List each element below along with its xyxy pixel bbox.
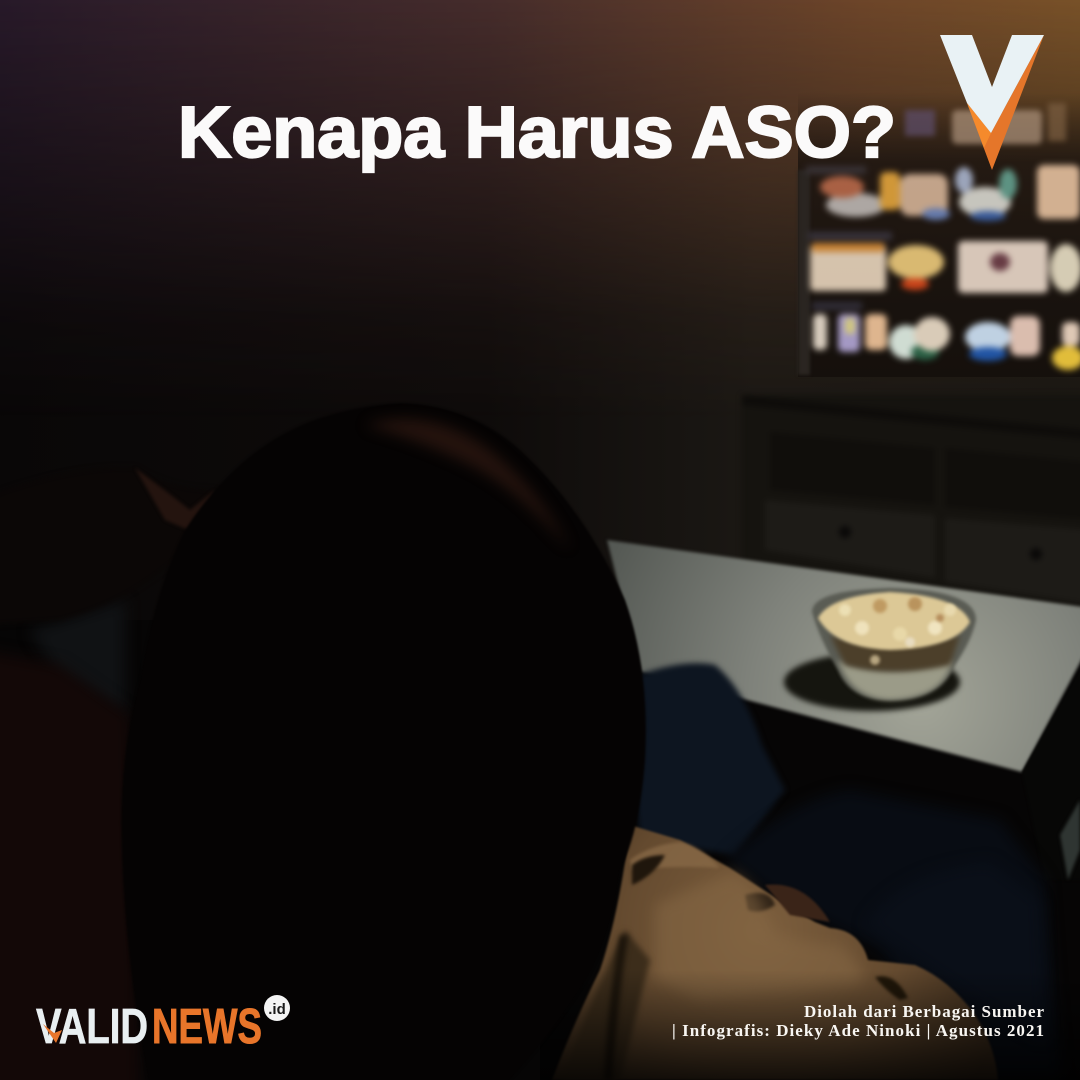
source credit (672, 1002, 1044, 1040)
woman's head silhouette (121, 403, 646, 1080)
top warm gradient overlay (0, 0, 1080, 330)
left person: dark shirt and hand (0, 468, 215, 1080)
television screen with blurred thumbnails (798, 92, 1080, 377)
left background patch behind person (30, 600, 125, 715)
logo: VALIDNEWS.id: .id (268, 1001, 286, 1018)
brand logo: V mark (940, 35, 1044, 170)
jeans: dark navy legs (625, 663, 1060, 1080)
table top (607, 540, 1080, 880)
top row, faded (905, 103, 1066, 144)
title: Kenapa Harus ASO? (178, 93, 896, 173)
hoodie folds (630, 842, 720, 870)
logo: VALIDNEWS.id (36, 995, 290, 1054)
hand (765, 884, 830, 922)
logo: VALIDNEWS.id: NEWS (152, 1000, 262, 1054)
row 3 (808, 232, 892, 240)
tv cabinet with drawers (742, 395, 1080, 615)
source credit: | Infografis: Dieky Ade Ninoki | Agustus 2021 (672, 1021, 1044, 1040)
bottom shade over hoodie (540, 970, 1080, 1080)
bowl shadow (784, 653, 960, 711)
sofa glint at right (1060, 800, 1080, 880)
row 4 (812, 302, 862, 310)
popcorn bowl (812, 588, 976, 700)
hair highlights (365, 419, 570, 550)
source credit: Diolah dari Berbagai Sumber (804, 1002, 1044, 1021)
hoodie: tan sweater (552, 825, 998, 1080)
row 2 (806, 166, 866, 174)
logo: VALIDNEWS.id: VALID (36, 1000, 148, 1054)
